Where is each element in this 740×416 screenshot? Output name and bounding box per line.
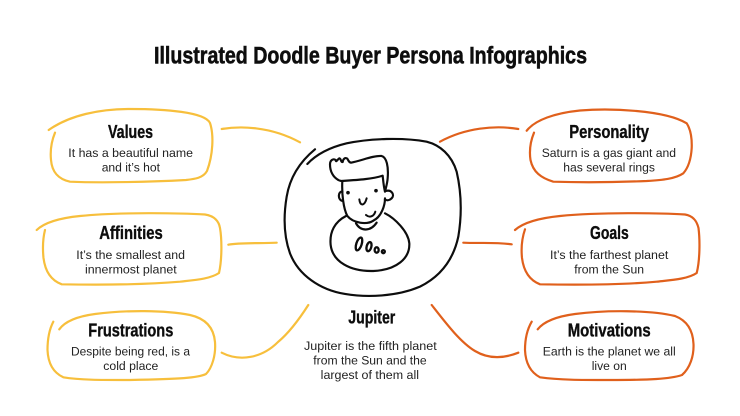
personality text: has several rings (563, 160, 655, 174)
frustrations text (71, 345, 190, 373)
values heading: Values (108, 122, 153, 142)
goals text: It’s the farthest planet (550, 248, 669, 262)
nose (359, 198, 367, 204)
goals text: from the Sun (574, 262, 644, 276)
motivations heading: Motivations (568, 321, 651, 341)
panel: affinities (37, 213, 221, 285)
values text: It has a beautiful name (68, 146, 193, 160)
smile (366, 212, 375, 217)
frustrations text: cold place (103, 359, 158, 373)
connector: motivations (432, 305, 518, 357)
hair (330, 156, 388, 192)
personality text (542, 146, 676, 174)
connector: affinities (228, 243, 277, 245)
motivations text: live on (592, 359, 627, 373)
affinities text (76, 248, 185, 276)
torso (330, 213, 409, 271)
Jupiter text: Jupiter is the fifth planet (304, 339, 437, 353)
personality outline (527, 110, 692, 182)
panel: goals (515, 213, 699, 285)
face (342, 181, 385, 223)
goals text (550, 248, 669, 276)
values outline (49, 109, 212, 182)
Jupiter text: from the Sun and the (313, 353, 427, 367)
frustrations heading: Frustrations (88, 321, 173, 341)
affinities heading: Affinities (99, 223, 163, 243)
shirt print (354, 237, 385, 253)
frustrations outline (48, 311, 215, 380)
Jupiter text (304, 339, 437, 382)
values text: and it’s hot (102, 160, 161, 174)
Jupiter text: largest of them all (321, 368, 419, 382)
icon: person (330, 156, 409, 271)
eyes (346, 189, 378, 194)
connector: values (222, 127, 300, 142)
panel: values (49, 109, 212, 182)
affinities text: innermost planet (85, 262, 177, 276)
panel: motivations (525, 311, 694, 380)
ears (339, 191, 393, 201)
motivations text (543, 345, 676, 373)
panel: frustrations (48, 311, 215, 380)
connector: personality (440, 127, 518, 142)
persona label: Jupiter (304, 307, 437, 382)
connector: goals (463, 243, 512, 244)
affinities text: It’s the smallest and (76, 248, 185, 262)
collar (356, 223, 377, 229)
connector: frustrations (222, 305, 308, 358)
personality heading: Personality (569, 122, 649, 142)
personality text: Saturn is a gas giant and (542, 146, 676, 160)
motivations outline (525, 311, 694, 380)
Jupiter heading: Jupiter (348, 307, 395, 327)
affinities outline (37, 213, 221, 285)
central persona illustration (285, 139, 461, 296)
goals outline (515, 213, 699, 285)
panel: personality (527, 110, 692, 182)
goals heading: Goals (590, 223, 629, 243)
values text (68, 146, 193, 174)
frustrations text: Despite being red, is a (71, 345, 190, 359)
title: Illustrated Doodle Buyer Persona Infographics (154, 42, 587, 70)
motivations text: Earth is the planet we all (543, 345, 676, 359)
hand-drawn circle (285, 139, 461, 296)
